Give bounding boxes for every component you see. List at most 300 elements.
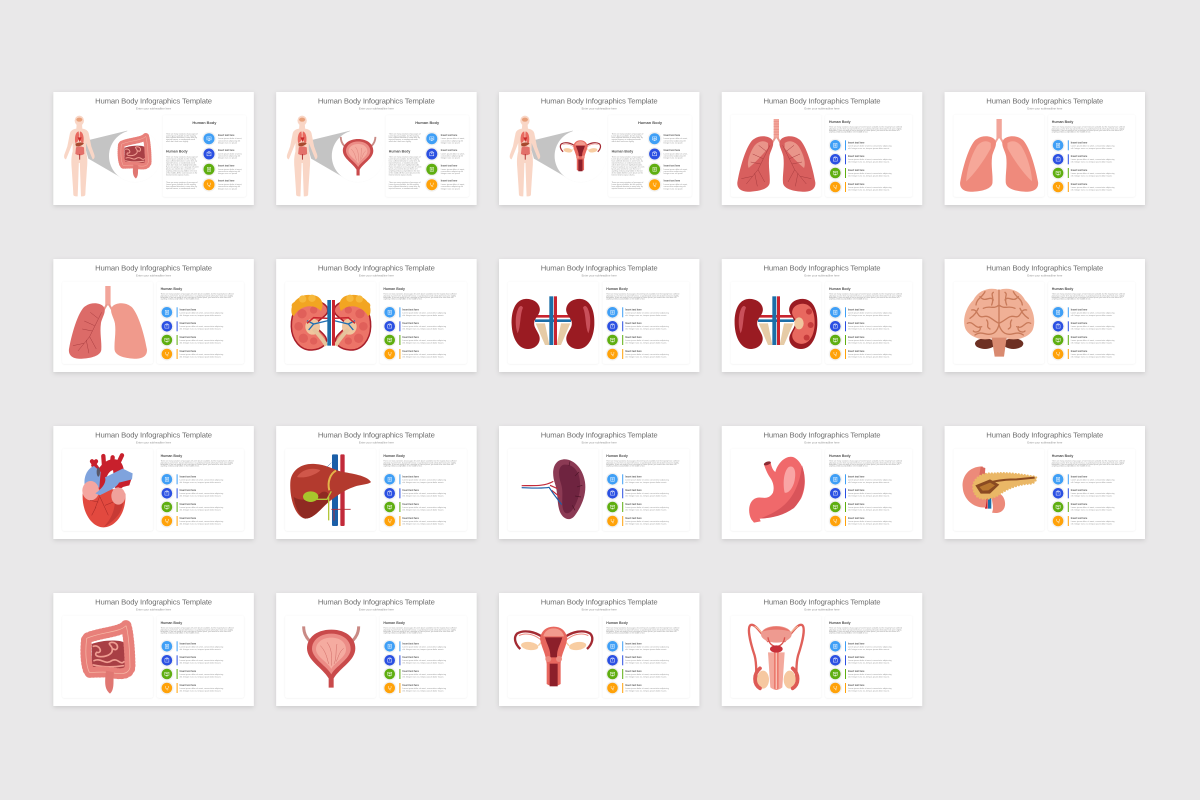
panel: illustration xyxy=(62,449,153,531)
list items: Lorem ipsum dolor sit amet, consectetur adipiscing xyxy=(180,311,223,314)
list items: elit. Integer nunc ex, tempus ipsum dolor mauris xyxy=(180,328,221,331)
panel: text: Human Body xyxy=(606,287,628,291)
list items: elit. Integer nunc ex, tempus ipsum dolor mauris xyxy=(1071,356,1112,358)
list items: consectetur adipiscing elit xyxy=(218,170,241,173)
list items: Integer nunc ex ipsum xyxy=(218,187,237,190)
subtitle: Enter your subheadline here xyxy=(582,607,617,611)
list items xyxy=(1071,142,1114,192)
list items: Lorem ipsum dolor sit amet, consectetur adipiscing xyxy=(625,659,669,662)
list items: consectetur adipiscing elit xyxy=(664,170,686,173)
panel: text: alteration in some form, by injected humour, or randomised words which don't look even slightly xyxy=(606,628,679,631)
subtitle: Enter your subheadline here xyxy=(1027,106,1063,110)
panel: text: There are many variations of passages of xyxy=(389,156,421,159)
subtitle: Enter your subheadline here xyxy=(359,440,394,444)
list items: elit. Integer nunc ex, tempus ipsum dolor mauris xyxy=(1071,328,1112,331)
list items: Insert text here xyxy=(625,350,642,353)
illustration: kidneys in section xyxy=(291,295,371,350)
list items: elit. Integer nunc ex, tempus ipsum dolor mauris xyxy=(848,188,889,192)
list items: consectetur adipiscing elit xyxy=(664,155,686,158)
panel: text: injected humour, or randomised words xyxy=(612,162,641,165)
illustration: body with zoomed uterus xyxy=(510,116,607,196)
list items: Insert text here xyxy=(625,489,642,492)
panel: text: There are many variations of passages of Lorem Ipsum available, but the majority have suffered xyxy=(1052,460,1125,463)
panel: text xyxy=(1048,115,1135,197)
panel: text: have suffered alteration in some form, by xyxy=(166,185,197,188)
subtitle: Enter your subheadline here xyxy=(359,607,394,611)
slide 8: kidneys whole xyxy=(499,259,699,372)
list items: Insert text here xyxy=(402,476,420,478)
list items xyxy=(625,308,669,358)
list items: elit. Integer nunc ex, tempus ipsum dolor mauris xyxy=(848,147,889,150)
slide background xyxy=(276,92,477,205)
list items: Lorem ipsum dolor sit amet, consectetur adipiscing xyxy=(848,311,892,314)
list items: Insert text here xyxy=(1071,517,1088,520)
panel: text: There are many variations of passages of Lorem Ipsum available, but the majority have suffered xyxy=(1052,293,1125,296)
slide background xyxy=(722,259,922,372)
list items: Insert text here xyxy=(1071,503,1088,506)
panel: text: Lorem Ipsum available, but the majority xyxy=(612,183,642,186)
list items: Lorem ipsum dolor sit amet, consectetur adipiscing xyxy=(402,339,446,342)
list items: Lorem ipsum dolor sit amet, consectetur adipiscing xyxy=(625,645,669,648)
subtitle: Enter your subheadline here xyxy=(582,106,617,110)
illustration: spleen xyxy=(522,459,585,519)
slide 18: uterus xyxy=(499,593,699,706)
list items: Insert text here xyxy=(1071,308,1088,312)
panel: text: believable. If you are going to use a passage of Lorem Ipsum, you need to be sure there isn't xyxy=(161,463,232,466)
panel: text: Human Body xyxy=(166,150,188,154)
panel: text: Lorem Ipsum available, but the majority xyxy=(612,158,642,161)
panel: text: Ipsum, you need to be sure there isn't xyxy=(389,168,418,171)
list items: elit. Integer nunc ex, tempus ipsum dolor mauris xyxy=(848,495,889,498)
list items: Insert text here xyxy=(848,183,865,186)
slide background xyxy=(499,593,699,706)
list items: elit. Integer nunc ex, tempus ipsum dolor mauris xyxy=(180,356,221,358)
list items: Lorem ipsum dolor sit amet, xyxy=(664,137,688,140)
icons and bars xyxy=(160,640,178,695)
list items: Lorem ipsum dolor sit amet, consectetur adipiscing xyxy=(1071,353,1114,356)
list items: Insert text here xyxy=(180,517,197,520)
panel: text xyxy=(386,115,469,197)
list items: elit. Integer nunc ex, tempus ipsum dolor mauris xyxy=(1071,481,1112,484)
panel: text: Human Body xyxy=(415,120,440,125)
panel: text: which don't look even slightly believable. xyxy=(166,164,197,167)
panel: text: alteration in some form, by injected humour, or randomised words which don't look even slightly xyxy=(1052,127,1124,130)
list items: elit. Integer nunc ex, tempus ipsum dolor mauris xyxy=(402,342,444,344)
panel: text: have suffered alteration in some form, by xyxy=(612,160,643,163)
list items xyxy=(664,134,688,190)
list items: Insert text here xyxy=(664,164,681,167)
list items: elit. Integer nunc ex, tempus ipsum dolor mauris xyxy=(1071,522,1112,526)
list items: elit. Integer nunc ex, tempus ipsum dolor mauris xyxy=(180,508,221,512)
list items: Lorem ipsum dolor sit amet, consectetur adipiscing xyxy=(625,311,669,314)
slide 6: lungs half detailed xyxy=(53,259,254,372)
list items xyxy=(1071,476,1114,526)
panel: text: There are many variations of passages of Lorem Ipsum available, but the majority have suffered xyxy=(606,627,679,630)
list items: Integer nunc ex ipsum xyxy=(441,187,460,190)
slide 7: kidneys section xyxy=(276,259,477,372)
panel: text: There are many variations of passages of Lorem Ipsum available, but the majority have suffered xyxy=(383,293,456,296)
panel: text: Internet tend to repeat chunks. xyxy=(166,174,190,177)
icon column xyxy=(648,132,662,192)
slide background xyxy=(722,426,922,539)
list items: Lorem ipsum dolor sit amet, consectetur adipiscing xyxy=(402,506,446,509)
list items xyxy=(218,134,242,190)
list items: Insert text here xyxy=(848,350,865,353)
list items: Lorem ipsum dolor sit amet, consectetur adipiscing xyxy=(625,492,669,495)
panel: text: Human Body xyxy=(192,120,217,125)
panel: text: Human Body xyxy=(161,287,182,291)
list items: elit. Integer nunc ex, tempus ipsum dolor mauris xyxy=(848,342,889,344)
panel: text: believable. If you are going to use a passage of Lorem Ipsum, you need to be sure there isn't xyxy=(383,463,454,466)
panel: text: Human Body xyxy=(161,454,182,458)
list items: elit. Integer nunc ex, tempus ipsum dolor mauris xyxy=(402,522,444,526)
slide background xyxy=(53,426,254,539)
illustration: stomach xyxy=(749,457,805,523)
list items xyxy=(180,308,223,358)
list items: elit. Integer nunc ex, tempus ipsum dolor mauris xyxy=(402,481,444,484)
slide background xyxy=(499,259,699,372)
title: Human Body Infographics Template xyxy=(763,430,880,439)
panel: illustration xyxy=(62,282,153,364)
list items: Lorem ipsum dolor sit amet, xyxy=(441,152,465,156)
illustration: lungs xyxy=(960,119,1038,192)
list items: Integer nunc ex ipsum xyxy=(664,157,683,160)
panel: text: anything embarrassing hidden in the text xyxy=(389,170,420,173)
list items: consectetur adipiscing elit xyxy=(664,185,686,188)
title: Human Body Infographics Template xyxy=(541,597,658,606)
list items: Lorem ipsum dolor sit amet, consectetur adipiscing xyxy=(180,520,223,523)
list items: Lorem ipsum dolor sit amet, consectetur adipiscing xyxy=(1071,186,1114,189)
list items: elit. Integer nunc ex, tempus ipsum dolor mauris xyxy=(1071,147,1112,150)
list items: Insert text here xyxy=(402,517,420,520)
list items: Insert text here xyxy=(1071,322,1088,325)
panel: text: anything embarrassing hidden in the middle of text. xyxy=(161,632,200,635)
list items: consectetur adipiscing elit xyxy=(441,170,463,173)
slide background xyxy=(53,593,254,706)
illustration: male reproductive system xyxy=(749,625,804,690)
panel: text: Human Body xyxy=(161,621,182,625)
list items: elit. Integer nunc ex, tempus ipsum dolor mauris xyxy=(1071,314,1112,317)
list items: Insert text here xyxy=(848,684,865,687)
panel: text: which don't look even slightly. xyxy=(389,140,412,143)
list items: Integer nunc ex ipsum xyxy=(441,172,460,175)
list items: Lorem ipsum dolor sit amet, consectetur adipiscing xyxy=(848,353,892,356)
panel: text: anything embarrassing hidden in the middle of text. xyxy=(829,632,868,635)
list items: Lorem ipsum dolor sit amet, xyxy=(441,137,465,140)
icons and bars xyxy=(606,473,623,528)
list items: Lorem ipsum dolor sit amet, consectetur adipiscing xyxy=(402,659,446,662)
icons and bars xyxy=(829,640,846,695)
list items: Insert text here xyxy=(402,336,420,339)
list items: Lorem ipsum dolor sit amet, consectetur adipiscing xyxy=(180,325,223,328)
panel: text: which don't look even slightly believable. xyxy=(612,164,643,167)
panel: text: alteration in some form, by injected humour, or randomised words which don't look even slightly xyxy=(829,127,902,130)
list items: Lorem ipsum dolor sit amet, consectetur adipiscing xyxy=(848,687,892,690)
panel: text: There are many variations of passages of xyxy=(389,181,421,184)
slide background xyxy=(53,259,254,372)
icon column xyxy=(202,132,216,192)
panel: text: Human Body xyxy=(829,454,851,458)
list items: elit. Integer nunc ex, tempus ipsum dolor mauris xyxy=(848,174,889,178)
list items: Lorem ipsum dolor sit amet, consectetur adipiscing xyxy=(180,645,223,648)
panel: text xyxy=(163,115,246,197)
panel: text: alteration in some form, by injected humour, or randomised words which don't look even slightly xyxy=(606,294,679,297)
list items: elit. Integer nunc ex, tempus ipsum dolor mauris xyxy=(848,676,889,678)
panel: text: alteration in some form, by injected humour, or randomised words which don't look even slightly xyxy=(606,461,679,464)
list items: Insert text here xyxy=(848,336,865,339)
list items: Insert text here xyxy=(180,336,197,339)
list items: Insert text here xyxy=(848,142,865,144)
slide 9: kidneys half section xyxy=(722,259,922,372)
list items: Insert text here xyxy=(1071,142,1088,144)
list items: Insert text here xyxy=(402,642,420,646)
list items: elit. Integer nunc ex, tempus ipsum dolor mauris xyxy=(1071,495,1112,498)
title: Human Body Infographics Template xyxy=(318,263,435,272)
list items: Insert text here xyxy=(848,476,865,478)
list items: Insert text here xyxy=(402,489,420,492)
panel: text: have suffered alteration in some form, by xyxy=(389,160,420,163)
panel: text xyxy=(825,449,912,531)
list items: Insert text here xyxy=(848,517,865,520)
panel: text: believable. If you are going to use a passage of Lorem Ipsum, you need to be sure there isn't xyxy=(1052,463,1123,466)
panel: text: Lorem Ipsum available, but the majority xyxy=(166,183,196,186)
list items: Lorem ipsum dolor sit amet, consectetur adipiscing xyxy=(848,673,892,676)
panel: text: believable. If you are going to use a passage of Lorem Ipsum, you need to be sure there isn't xyxy=(829,296,900,299)
panel: text: anything embarrassing hidden in the middle of text. xyxy=(1052,131,1091,134)
panel: text: anything embarrassing hidden in the text xyxy=(612,170,643,173)
list items: Lorem ipsum dolor sit amet, consectetur adipiscing xyxy=(402,645,446,648)
list items: elit. Integer nunc ex, tempus ipsum dolor mauris xyxy=(180,690,221,692)
panel: text: Ipsum, you need to be sure there isn't xyxy=(612,168,641,171)
title: Human Body Infographics Template xyxy=(318,430,435,439)
list items: Integer nunc ex ipsum xyxy=(441,157,460,160)
panel: text xyxy=(608,115,692,197)
icons and bars xyxy=(160,473,178,528)
subtitle: Enter your subheadline here xyxy=(136,106,172,110)
list items: Insert text here xyxy=(625,684,642,687)
slide 11: heart xyxy=(53,426,254,539)
list items: Integer nunc ex ipsum xyxy=(218,157,237,160)
icons and bars xyxy=(1052,306,1069,361)
panel: text: Human Body xyxy=(829,621,851,625)
panel: text: which don't look even slightly believable. xyxy=(389,164,420,167)
list items: Lorem ipsum dolor sit amet, xyxy=(218,168,242,171)
list items xyxy=(402,476,446,526)
subtitle: Enter your subheadline here xyxy=(582,273,617,277)
panel: text: have suffered alteration in some form, by xyxy=(166,136,197,139)
list items: Lorem ipsum dolor sit amet, consectetur adipiscing xyxy=(402,520,446,523)
list items: Insert text here xyxy=(441,149,458,152)
list items: Lorem ipsum dolor sit amet, consectetur adipiscing xyxy=(402,687,446,690)
slide 14: stomach xyxy=(722,426,922,539)
panel: text: anything embarrassing hidden in the middle of text. xyxy=(829,465,868,468)
list items: consectetur adipiscing elit xyxy=(441,155,463,158)
panel: text: injected humour, or randomised words xyxy=(389,162,418,165)
list items: Integer nunc ex ipsum xyxy=(664,187,683,190)
illustration: uterus xyxy=(515,627,592,686)
list items: Lorem ipsum dolor sit amet, consectetur adipiscing xyxy=(848,186,892,189)
panel: illustration xyxy=(731,616,821,698)
illustration: intestine xyxy=(86,626,130,694)
illustration: heart xyxy=(82,455,133,527)
list items: Integer nunc ex ipsum xyxy=(218,172,237,175)
panel: text: Ipsum, you need to be sure there isn't xyxy=(166,168,195,171)
subtitle: Enter your subheadline here xyxy=(804,106,840,110)
panel: text: believable. If you are going to use a passage of Lorem Ipsum, you need to be sure there isn't xyxy=(1052,129,1123,132)
panel: text: have suffered alteration in some form, by xyxy=(612,185,643,188)
panel: text: anything embarrassing hidden in the middle of text. xyxy=(383,298,423,301)
panel: illustration xyxy=(508,282,598,364)
title: Human Body Infographics Template xyxy=(986,263,1103,272)
list items: Lorem ipsum dolor sit amet, consectetur adipiscing xyxy=(180,506,223,509)
panel: text: have suffered alteration in some form, by xyxy=(612,136,643,139)
list items: Lorem ipsum dolor sit amet, consectetur adipiscing xyxy=(848,325,892,328)
list items xyxy=(402,308,446,358)
list items: Lorem ipsum dolor sit amet, consectetur adipiscing xyxy=(625,687,669,690)
list items: Lorem ipsum dolor sit amet, consectetur adipiscing xyxy=(180,659,223,662)
list items: Insert text here xyxy=(625,656,642,659)
panel: text: There are many variations of passages of xyxy=(166,156,198,159)
icons and bars xyxy=(383,640,400,695)
panel: illustration xyxy=(285,616,376,698)
list items: Lorem ipsum dolor sit amet, consectetur adipiscing xyxy=(848,158,892,161)
illustration: kidneys whole xyxy=(512,296,594,349)
title: Human Body Infographics Template xyxy=(541,430,658,439)
panel: text: anything embarrassing hidden in the middle of text. xyxy=(383,465,423,468)
slide background xyxy=(722,593,922,706)
panel: text: anything embarrassing hidden in the middle of text. xyxy=(161,465,200,468)
list items: elit. Integer nunc ex, tempus ipsum dolor mauris xyxy=(848,508,889,512)
list items: Insert text here xyxy=(180,308,197,312)
panel: text: Internet tend to repeat chunks. xyxy=(389,174,413,177)
list items: elit. Integer nunc ex, tempus ipsum dolor mauris xyxy=(180,495,221,498)
panel: illustration xyxy=(508,616,598,698)
title: Human Body Infographics Template xyxy=(318,96,435,105)
icons and bars xyxy=(606,306,623,361)
panel: illustration xyxy=(954,115,1044,197)
list items: Lorem ipsum dolor sit amet, consectetur adipiscing xyxy=(180,687,223,690)
panel: text: believable. If you are going to use a passage of Lorem Ipsum, you need to be sure there isn't xyxy=(606,630,677,633)
panel: text: injected humour, or randomised words. xyxy=(612,187,642,190)
list items: Insert text here xyxy=(180,642,197,646)
list items: consectetur adipiscing elit xyxy=(441,139,463,142)
panel: text: which don't look even slightly. xyxy=(166,140,189,143)
list items: Insert text here xyxy=(441,134,458,137)
list items: Insert text here xyxy=(848,308,865,312)
panel: text: have suffered alteration in some form, by xyxy=(389,185,420,188)
list items: Lorem ipsum dolor sit amet, consectetur adipiscing xyxy=(180,353,223,356)
list items: elit. Integer nunc ex, tempus ipsum dolor mauris xyxy=(180,676,221,678)
icons and bars xyxy=(829,473,846,528)
illustration: pancreas xyxy=(963,466,1036,513)
list items: Lorem ipsum dolor sit amet, xyxy=(664,152,688,156)
panel: text: injected humour, or randomised words xyxy=(166,162,195,165)
panel: text: of the middle. All the Lorem Ipsum on the xyxy=(389,172,420,175)
panel: text xyxy=(380,616,467,698)
panel: text: alteration in some form, by injected humour, or randomised words which don't look even slightly xyxy=(1052,461,1124,464)
panel: text: There are many variations of passages of xyxy=(612,181,644,184)
list items: Lorem ipsum dolor sit amet, consectetur adipiscing xyxy=(848,172,892,175)
slide 15: pancreas xyxy=(945,426,1145,539)
slide 16: intestine xyxy=(53,593,254,706)
panel: text: believable. If you are going to use a passage of Lorem Ipsum, you need to be sure there isn't xyxy=(161,630,232,633)
list items: Insert text here xyxy=(848,169,865,172)
panel: text: If you are going to use a passage of Lorem xyxy=(389,166,422,169)
list items: elit. Integer nunc ex, tempus ipsum dolor mauris xyxy=(848,356,889,358)
list items: Insert text here xyxy=(180,489,197,492)
panel: text: anything embarrassing hidden in the middle of text. xyxy=(1052,298,1091,301)
panel: text: alteration in some form, by injected humour, or randomised words which don't look even slightly xyxy=(383,294,456,297)
panel: text: believable. If you are going to use a passage of Lorem Ipsum, you need to be sure there isn't xyxy=(383,630,454,633)
list items: consectetur adipiscing elit xyxy=(218,155,241,158)
panel: text: There are many variations of passages of Lorem Ipsum available, but the majority have suffered xyxy=(161,460,234,463)
subtitle: Enter your subheadline here xyxy=(582,440,617,444)
panel: text: believable. If you are going to use a passage of Lorem Ipsum, you need to be sure there isn't xyxy=(161,296,232,299)
list items: elit. Integer nunc ex, tempus ipsum dolor mauris xyxy=(848,522,889,526)
panel: text: Human Body xyxy=(606,454,628,458)
list items: Lorem ipsum dolor sit amet, consectetur adipiscing xyxy=(1071,478,1114,481)
list items: Lorem ipsum dolor sit amet, consectetur adipiscing xyxy=(402,673,446,676)
title: Human Body Infographics Template xyxy=(541,96,658,105)
list items: elit. Integer nunc ex, tempus ipsum dolor mauris xyxy=(180,648,221,651)
panel: text: Human Body xyxy=(612,150,633,154)
panel: text: alteration in some form, by injected humour, or randomised words which don't look even slightly xyxy=(1052,294,1124,297)
subtitle: Enter your subheadline here xyxy=(804,273,840,277)
title: Human Body Infographics Template xyxy=(763,263,880,272)
list items: elit. Integer nunc ex, tempus ipsum dolor mauris xyxy=(625,356,666,358)
list items: Insert text here xyxy=(848,642,865,646)
icons and bars xyxy=(383,306,400,361)
list items xyxy=(848,642,892,692)
icons and bars xyxy=(829,306,846,361)
list items: elit. Integer nunc ex, tempus ipsum dolor mauris xyxy=(625,522,666,526)
panel: text: anything embarrassing hidden in the middle of text. xyxy=(606,465,646,468)
list items: Insert text here xyxy=(402,322,420,325)
icons and bars xyxy=(160,306,178,361)
list items: Insert text here xyxy=(664,134,681,137)
list items: elit. Integer nunc ex, tempus ipsum dolor mauris xyxy=(848,648,889,651)
list items: elit. Integer nunc ex, tempus ipsum dolor mauris xyxy=(625,676,666,678)
list items: Insert text here xyxy=(625,670,642,673)
list items: Insert text here xyxy=(625,476,642,478)
list items: Insert text here xyxy=(1071,476,1088,478)
panel: text: anything embarrassing hidden in the text xyxy=(166,170,197,173)
panel: text: injected humour, or randomised words xyxy=(389,138,418,141)
subtitle: Enter your subheadline here xyxy=(1027,440,1063,444)
list items: elit. Integer nunc ex, tempus ipsum dolor mauris xyxy=(625,648,666,651)
icons and bars xyxy=(829,139,846,194)
panel: text: injected humour, or randomised words. xyxy=(389,187,419,190)
list items: Lorem ipsum dolor sit amet, consectetur adipiscing xyxy=(625,325,669,328)
list items: Insert text here xyxy=(848,670,865,673)
list items: Lorem ipsum dolor sit amet, consectetur adipiscing xyxy=(848,339,892,342)
slide 13: spleen xyxy=(499,426,699,539)
list items: elit. Integer nunc ex, tempus ipsum dolor mauris xyxy=(1071,174,1112,178)
list items: Lorem ipsum dolor sit amet, xyxy=(218,137,242,140)
slide 2: body with bladder xyxy=(276,92,477,205)
list items: Lorem ipsum dolor sit amet, xyxy=(218,152,242,156)
slide background xyxy=(276,259,477,372)
list items: elit. Integer nunc ex, tempus ipsum dolor mauris xyxy=(180,342,221,344)
list items: Lorem ipsum dolor sit amet, consectetur adipiscing xyxy=(1071,506,1114,509)
panel: illustration xyxy=(954,282,1044,364)
panel: illustration xyxy=(731,282,821,364)
list items: Insert text here xyxy=(625,336,642,339)
panel: text xyxy=(380,282,467,364)
panel: text: anything embarrassing hidden in the middle of text. xyxy=(383,632,423,635)
panel: text: There are many variations of passages of Lorem Ipsum available, but the majority have suffered xyxy=(606,293,679,296)
list items: Insert text here xyxy=(625,308,642,312)
